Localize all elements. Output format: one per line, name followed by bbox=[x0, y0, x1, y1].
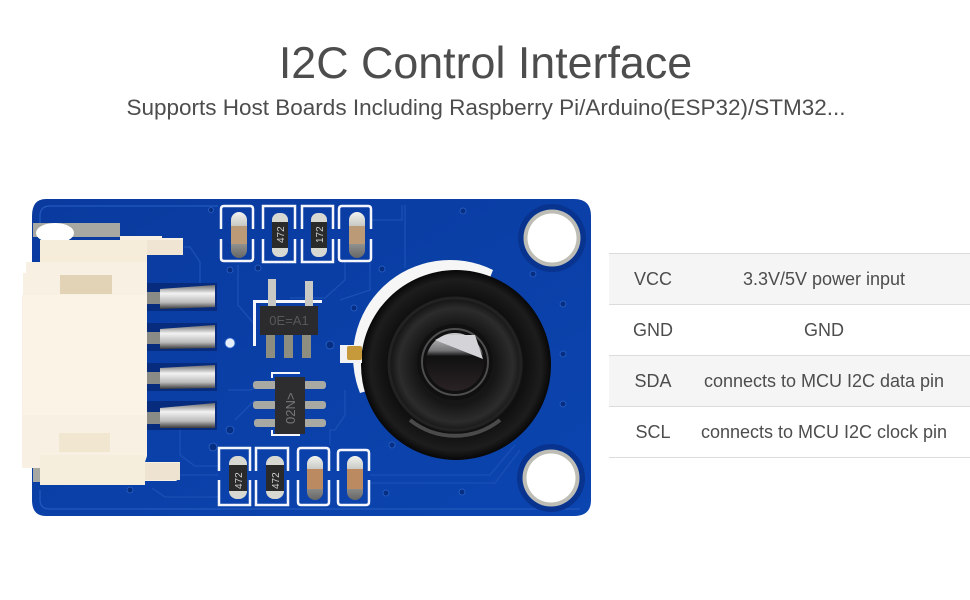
bottom capacitors and resistors bbox=[219, 448, 369, 505]
row: GND bbox=[609, 304, 970, 355]
title: I2C Control Interface bbox=[279, 38, 692, 88]
row: GND: GND bbox=[804, 320, 844, 340]
sensor interface chip: 02N> bbox=[283, 393, 298, 424]
top capacitors and resistors: 172 bbox=[315, 226, 326, 243]
pin table bbox=[609, 253, 970, 458]
row: SDA: SDA bbox=[634, 371, 672, 391]
row: SDA: connects to MCU I2C data pin bbox=[704, 371, 944, 391]
pcb board bbox=[32, 199, 591, 516]
connector solder pins bbox=[147, 283, 217, 430]
sensor interface chip bbox=[253, 373, 326, 435]
regulator chip: 0E=A1 bbox=[269, 313, 309, 328]
white connector housing bbox=[22, 223, 183, 485]
row: SCL: connects to MCU I2C clock pin bbox=[701, 422, 947, 442]
bottom capacitors and resistors: 472 bbox=[271, 472, 282, 489]
row: VCC bbox=[609, 253, 970, 304]
row: VCC: 3.3V/5V power input bbox=[743, 269, 905, 289]
row: VCC: VCC bbox=[634, 269, 672, 289]
row: SCL bbox=[609, 406, 970, 458]
mounting holes bbox=[517, 204, 586, 512]
bottom capacitors and resistors: 472 bbox=[234, 472, 245, 489]
regulator chip bbox=[253, 279, 322, 358]
row: SCL: SCL bbox=[635, 422, 670, 442]
infrared sensor lens bbox=[340, 260, 551, 460]
row: GND: GND bbox=[633, 320, 673, 340]
row: SDA bbox=[609, 355, 970, 406]
top capacitors and resistors bbox=[221, 206, 371, 262]
top capacitors and resistors: 472 bbox=[276, 226, 287, 243]
subtitle: Supports Host Boards Including Raspberry Pi/Arduino(ESP32)/STM32... bbox=[126, 95, 846, 120]
